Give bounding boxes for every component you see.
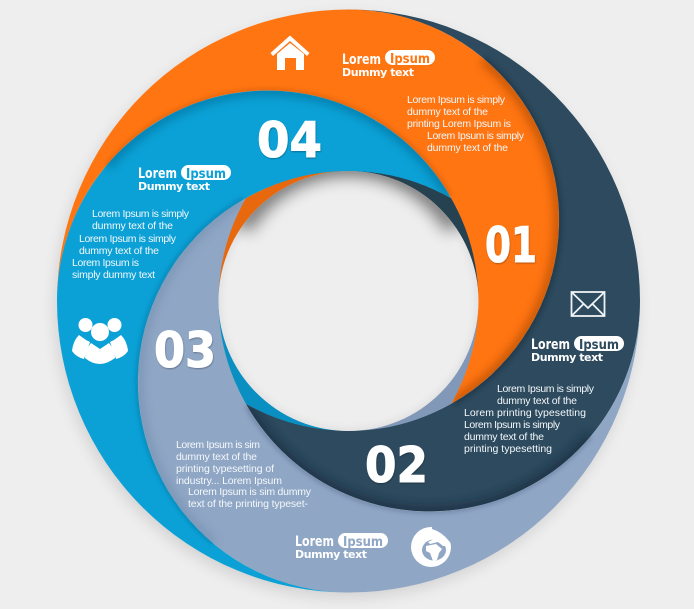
heading: 01 label: Ipsum [390, 52, 430, 67]
heading: 01 label: Dummy text [342, 66, 414, 79]
dark crescent top right [348, 171, 478, 301]
heading: 02 label: Dummy text [531, 351, 603, 364]
heading: 02 label: Lorem [531, 337, 570, 353]
heading: 03 label [295, 533, 388, 561]
blue crescent bottom left [218, 301, 348, 431]
text block: 03: industry... Lorem Ipsum [176, 475, 282, 487]
text block: 02: dummy text of the [464, 431, 544, 443]
centre hole [216, 167, 482, 434]
heading: 03 label: Ipsum [343, 535, 383, 550]
text block: 02: dummy text of the [497, 395, 577, 407]
number 03: 03 [154, 322, 216, 379]
text block: 04: dummy text of the [92, 220, 173, 232]
heading: 04 label [138, 165, 231, 193]
text block: 02 [464, 383, 595, 455]
text block: 02: Lorem Ipsum is simply [464, 419, 561, 431]
heading: 01 label: Lorem [342, 52, 381, 68]
text block: 03: printing typesetting of [176, 463, 274, 475]
text block: 01: printing Lorem Ipsum is [407, 118, 511, 130]
text block: 04: simply dummy text [72, 269, 155, 281]
text block: 03: Lorem Ipsum is sim dummy [188, 486, 312, 498]
text block: 03: text of the printing typeset- [188, 498, 308, 510]
light crescent bottom right [348, 301, 478, 431]
heading: 02 label [531, 336, 624, 364]
text block: 03: Lorem Ipsum is sim [176, 439, 260, 451]
icon: globe [411, 525, 453, 567]
panel: 02 dark segment [246, 9, 640, 511]
text block: 04: Lorem Ipsum is [72, 257, 139, 269]
number 02: 02 [365, 437, 428, 494]
panel: 03 light blue-grey segment [138, 198, 640, 593]
heading: 04 label: Dummy text [138, 180, 210, 193]
text block: 04 [72, 208, 190, 281]
text block: 01: Lorem Ipsum is simply [407, 94, 506, 106]
text block: 02: Lorem printing typesetting [464, 407, 586, 419]
orange crescent top left [218, 171, 348, 301]
heading: 03 label: Lorem [295, 534, 334, 550]
text block: 01: dummy text of the [407, 106, 488, 118]
number 04: 04 [257, 112, 322, 169]
heading: 02 label: Ipsum [579, 338, 619, 353]
number 01: 01 [485, 217, 537, 274]
icon: people [72, 318, 128, 364]
text block: 01: dummy text of the [427, 142, 508, 154]
text block: 03 [176, 439, 312, 510]
text block: 03: dummy text of the [176, 451, 257, 463]
text block: 02: printing typesetting [464, 443, 552, 455]
drop shadow of ring [56, 17, 636, 597]
heading: 01 label [342, 50, 435, 79]
heading: 04 label: Lorem [138, 166, 177, 182]
text block: 01 [407, 94, 525, 154]
heading: 04 label: Ipsum [186, 167, 226, 182]
text block: 04: Lorem Ipsum is simply [92, 208, 190, 220]
icon: envelope [572, 292, 604, 316]
icon: house [270, 36, 310, 70]
heading: 03 label: Dummy text [295, 548, 367, 561]
text block: 02: Lorem Ipsum is simply [497, 383, 595, 395]
text block: 01: Lorem Ipsum is simply [427, 130, 525, 142]
panel: 04 blue segment [57, 91, 451, 593]
text block: 04: Lorem Ipsum is simply [79, 233, 177, 245]
text block: 04: dummy text of the [79, 245, 159, 257]
panel: 01 orange segment [57, 10, 559, 404]
